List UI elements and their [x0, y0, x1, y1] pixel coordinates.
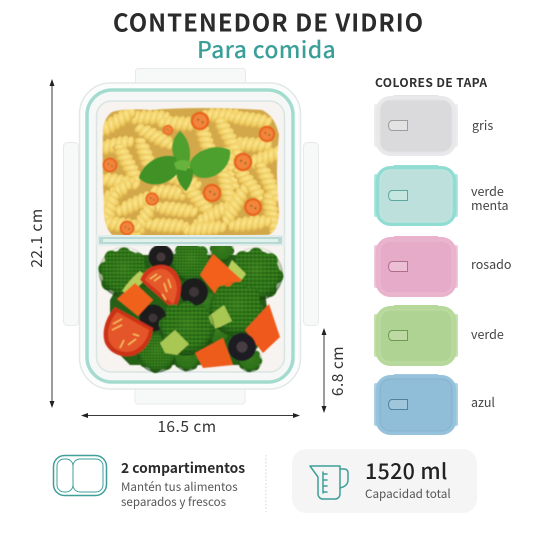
- title: CONTENEDOR DE VIDRIO: [113, 4, 424, 38]
- lid: rosado: rosado: [471, 254, 512, 273]
- lid: gris: gris: [472, 115, 493, 134]
- lid: verde: [374, 305, 504, 366]
- lid: azul: [374, 374, 495, 435]
- carrot cube: [117, 254, 242, 316]
- dimension: height 22.1 cm: [25, 79, 54, 408]
- broccoli back: [98, 238, 283, 373]
- compartments text: 2 compartimentos: [121, 457, 245, 477]
- container tabs: [64, 68, 318, 404]
- container rim: [80, 83, 300, 389]
- lid: verde: verde: [471, 324, 504, 343]
- dimension: depth 6.8 cm: [322, 328, 348, 413]
- tomato: [140, 265, 181, 310]
- carrot cubes: [195, 304, 280, 368]
- lid: azul: azul: [471, 392, 495, 411]
- capacity panel: Capacidad total: [365, 485, 451, 502]
- olives: [140, 244, 208, 332]
- lid: gris: [374, 95, 493, 156]
- basil leaves: [139, 131, 230, 191]
- olive: [228, 333, 256, 361]
- compartments text: separados y frescos: [121, 494, 226, 510]
- compartments text: [121, 457, 245, 510]
- dimension: width 16.5 cm: [81, 413, 300, 437]
- lid: verde menta: [374, 165, 509, 226]
- inner glass: [96, 101, 284, 372]
- lid colours heading: COLORES DE TAPA: [375, 74, 488, 91]
- lid: verde menta: menta: [471, 195, 509, 214]
- glass container: [64, 68, 318, 404]
- dimension: width 16.5 cm: 16.5 cm: [157, 415, 217, 437]
- food: pasta: [102, 107, 280, 235]
- subtitle: Para comida: [197, 31, 336, 65]
- dimension: depth 6.8 cm: 6.8 cm: [326, 346, 348, 396]
- lid: rosado: [374, 236, 512, 297]
- broccoli front: [159, 281, 265, 356]
- lid: verde menta: verde: [471, 181, 504, 200]
- teal gasket: [87, 90, 293, 382]
- compartments text: Mantén tus alimentos: [121, 479, 238, 495]
- tomato large: [104, 307, 153, 356]
- icon: compartments: [54, 456, 106, 496]
- capacity panel: 1520 ml: [365, 455, 448, 486]
- glass divider: [96, 235, 285, 246]
- food: vegetables: [98, 238, 283, 373]
- dimension: height 22.1 cm: 22.1 cm: [25, 208, 47, 268]
- capacity panel: [292, 449, 477, 513]
- icon: measuring cup: [310, 466, 348, 499]
